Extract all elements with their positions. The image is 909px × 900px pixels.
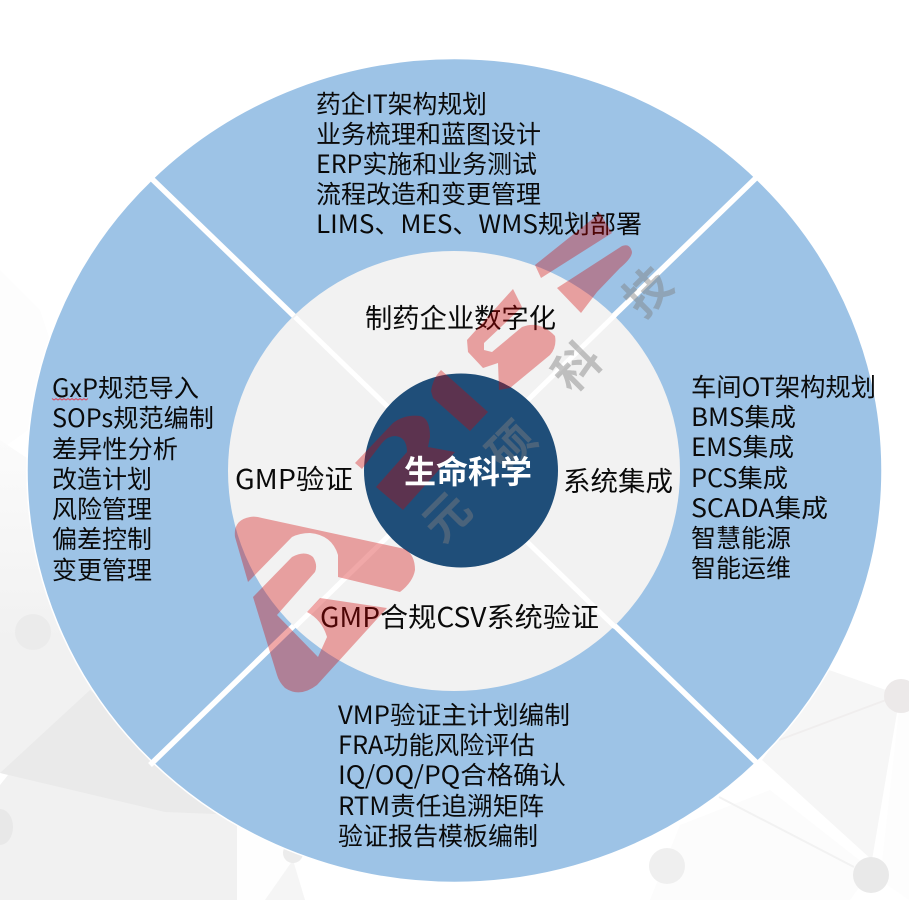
list: GMP compliance — [52, 369, 214, 587]
list: CSV validation: RTM责任追溯矩阵 — [338, 787, 544, 823]
list: GMP compliance: 变更管理 — [52, 551, 152, 587]
list: GMP compliance: 差异性分析 — [52, 430, 178, 466]
list: system integration: PCS集成 — [691, 459, 788, 495]
watermark: company name: 元 — [412, 482, 482, 552]
list: enterprise IT planning: ERP实施和业务测试 — [316, 145, 537, 181]
list: GMP compliance: 偏差控制 — [52, 520, 152, 556]
list: system integration: 智能运维 — [691, 549, 791, 585]
list: GMP compliance: SOPs规范编制 — [52, 399, 214, 435]
watermark: RISE logo — [235, 213, 632, 692]
watermark: company name: 科 — [542, 332, 612, 402]
list: enterprise IT planning: 业务梳理和蓝图设计 — [316, 115, 541, 151]
centre circle — [364, 374, 558, 568]
watermark: company name: 技 — [613, 257, 683, 327]
watermark: company name — [412, 257, 683, 552]
list: enterprise IT planning: 流程改造和变更管理 — [316, 175, 541, 211]
middle ring: categories — [228, 251, 680, 691]
list: GMP compliance: 改造计划 — [52, 460, 152, 496]
list: CSV validation — [338, 696, 570, 853]
background network pattern — [0, 270, 909, 900]
list: system integration: BMS集成 — [691, 398, 796, 434]
list: GMP compliance: GxP规范导入 — [52, 369, 199, 405]
list: CSV validation: VMP验证主计划编制 — [338, 696, 570, 732]
list: GMP compliance: 风险管理 — [52, 490, 152, 526]
list: system integration — [691, 368, 876, 585]
watermark: company name: 硕 — [477, 411, 547, 481]
list: CSV validation: 验证报告模板编制 — [338, 817, 538, 853]
list: enterprise IT planning: 药企IT架构规划 — [316, 85, 487, 121]
list: CSV validation: FRA功能风险评估 — [338, 726, 535, 762]
list: CSV validation: IQ/OQ/PQ合格确认 — [338, 756, 566, 792]
list: system integration: 智慧能源 — [691, 519, 791, 555]
list: enterprise IT planning: LIMS、MES、WMS规划部署 — [316, 205, 642, 241]
list: system integration: SCADA集成 — [691, 489, 828, 525]
list: system integration: EMS集成 — [691, 428, 794, 464]
centre title: 生命科学 — [404, 447, 532, 493]
label: GMP validation: GMP验证 — [235, 458, 353, 497]
label: pharma digitalisation: 制药企业数字化 — [365, 297, 556, 336]
list: enterprise IT planning — [316, 85, 642, 241]
list: system integration: 车间OT架构规划 — [691, 368, 876, 404]
label: system integration: 系统集成 — [563, 460, 673, 499]
label: GMP compliant CSV validation: GMP合规CSV系统验证 — [320, 596, 599, 635]
